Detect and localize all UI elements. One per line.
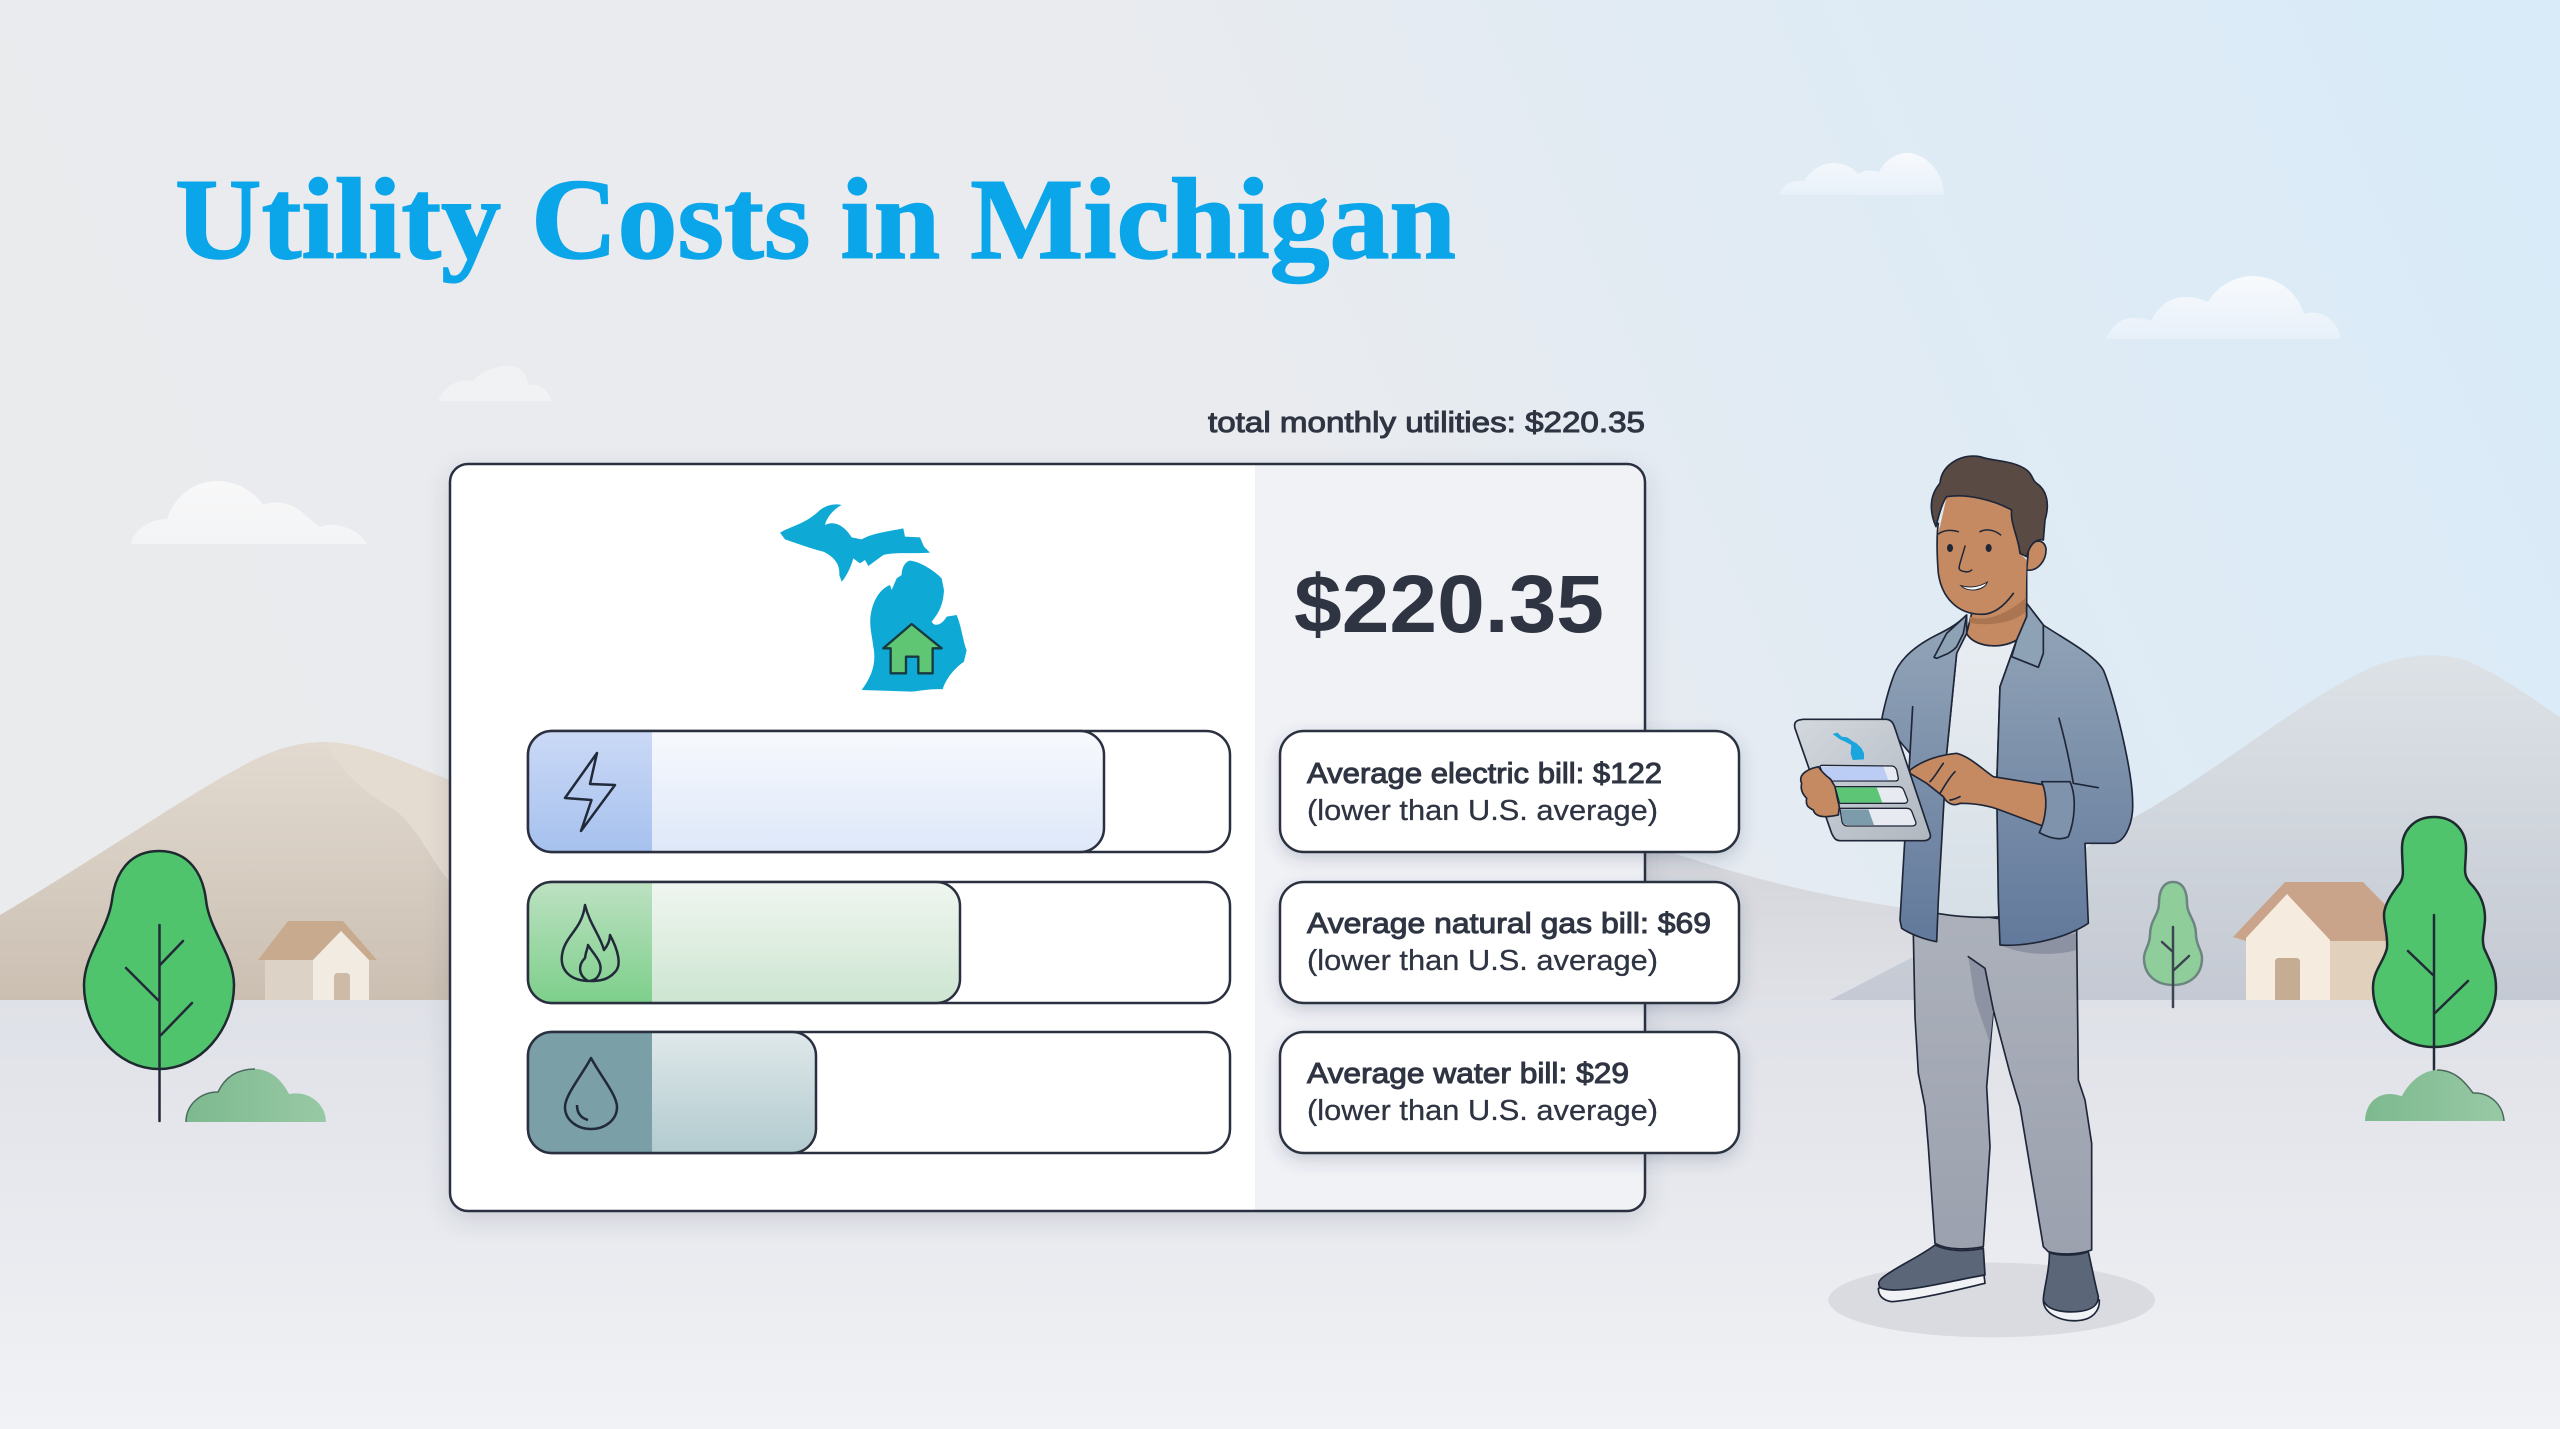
ear <box>2027 541 2046 570</box>
house: left <box>258 921 377 1000</box>
cloud: top centre <box>1779 153 1944 195</box>
holding hand <box>1801 767 1839 817</box>
bar: water <box>528 1032 1230 1153</box>
ground <box>0 1000 2560 1429</box>
callout: natural gas: Average natural gas bill: $69 <box>1307 908 1711 940</box>
label: total monthly utilities: total monthly utilities: $220.35 <box>1208 407 1645 439</box>
total amount: $220.35 <box>1294 559 1604 650</box>
main card <box>450 464 1645 1211</box>
icon: Michigan map with house <box>780 504 967 692</box>
ground shadow <box>1828 1263 2155 1337</box>
collar right <box>2012 603 2043 667</box>
callout: water: (lower than U.S. average) <box>1307 1095 1658 1127</box>
person holding tablet <box>1795 456 2155 1337</box>
sleeve cuff <box>2039 782 2074 839</box>
neck <box>1967 567 2027 646</box>
face <box>1937 496 2027 614</box>
title: Utility Costs in Michigan <box>175 156 1456 283</box>
jacket fold lines <box>1910 707 2098 788</box>
left shoe <box>1878 1245 1985 1302</box>
collar left <box>1934 615 1967 658</box>
tablet <box>1795 719 1930 841</box>
tree: small right <box>2144 882 2202 1007</box>
tablet map <box>1833 733 1864 760</box>
facial features <box>1938 530 2001 590</box>
tree: large right <box>2373 817 2496 1070</box>
callout: water <box>1280 1032 1739 1153</box>
house: right <box>2233 882 2410 1000</box>
cloud: left <box>131 481 367 544</box>
cloud: small centre <box>438 366 552 401</box>
callout: water: Average water bill: $29 <box>1307 1058 1629 1090</box>
tree: left <box>84 851 234 1121</box>
callout: natural gas: (lower than U.S. average) <box>1307 945 1658 977</box>
bar: electric <box>528 731 1230 852</box>
tablet bar: gas <box>1835 787 1908 803</box>
bush: left <box>186 1069 326 1122</box>
callout: electric <box>1280 731 1739 852</box>
right shoe <box>2043 1252 2099 1321</box>
mountain: lower right foothill <box>1645 845 1920 1000</box>
forearm and pointing hand <box>1910 753 2047 826</box>
bar: natural gas <box>528 882 1230 1003</box>
t-shirt <box>1937 633 2017 917</box>
tablet bar: water <box>1840 808 1916 826</box>
callout: electric: Average electric bill: $122 <box>1307 758 1662 790</box>
tablet bar: electric <box>1820 765 1898 781</box>
cloud: top right <box>2106 276 2340 339</box>
jacket right panel <box>1997 603 2133 945</box>
trousers <box>1913 910 2092 1254</box>
neck shadow <box>1969 598 2026 624</box>
jacket left panel <box>1882 615 1967 942</box>
bush: right <box>2365 1070 2504 1121</box>
callout: natural gas <box>1280 882 1739 1003</box>
face outline <box>1937 523 2013 614</box>
hair <box>1931 456 2047 557</box>
mountain: right <box>1830 655 2560 1000</box>
mountain: left <box>0 742 460 1000</box>
callout: electric: (lower than U.S. average) <box>1307 795 1658 827</box>
